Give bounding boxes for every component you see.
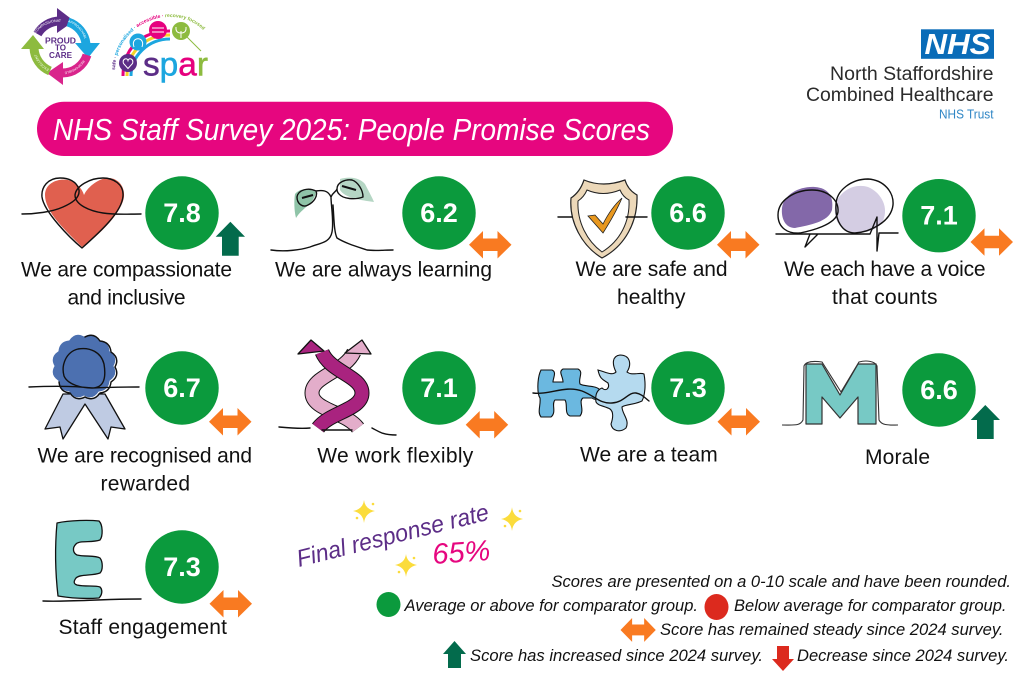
- icon: letter E: [43, 520, 141, 601]
- score circle: 6.6: [669, 198, 707, 228]
- score circle: [651, 351, 725, 425]
- label: We are safe and: [576, 258, 728, 281]
- label: We are always learning: [275, 258, 492, 282]
- logo: Proud to Care: EXCELLENT: [34, 54, 49, 71]
- label: We are recognised and: [38, 444, 252, 467]
- icon: speech bubbles: [776, 179, 898, 251]
- logo: NHS North Staffordshire Combined Healthcare: [806, 29, 994, 122]
- trust name: [806, 64, 994, 122]
- icon: shield with tick: [558, 180, 647, 258]
- panel: voice that counts: [776, 179, 1013, 309]
- label: [576, 258, 728, 309]
- score circle: [902, 179, 976, 252]
- label: rewarded: [100, 472, 190, 496]
- legend: decrease text: Decrease since 2024 survey.: [797, 647, 1009, 665]
- legend: orange steady arrow: [620, 618, 656, 642]
- NHS lozenge: NHS: [924, 29, 991, 61]
- score circle: [145, 176, 219, 250]
- arrow: increased: [216, 222, 245, 256]
- label: Morale: [865, 446, 930, 469]
- score circle: 6.7: [163, 373, 201, 403]
- trust name: NHS Trust: [939, 108, 994, 122]
- score circle: 7.1: [920, 201, 958, 231]
- label: We are a team: [580, 444, 718, 467]
- legend: green up arrow: [443, 641, 466, 668]
- legend: scale note: Scores are presented on a 0-10 scale and have been rounded.: [552, 573, 1011, 591]
- logo: Proud to Care: RESPONSIBLE: [64, 60, 85, 74]
- panel: safe and healthy: [558, 176, 760, 309]
- score circle: [402, 351, 476, 425]
- label: [21, 258, 232, 310]
- label: healthy: [617, 286, 686, 309]
- logo: Proud to Care: [21, 8, 100, 85]
- logo: Proud to Care: TO: [55, 44, 66, 53]
- icon: jigsaw pieces: [533, 355, 649, 431]
- label: We are compassionate: [21, 258, 232, 282]
- score circle: 7.3: [163, 552, 201, 582]
- panel: recognised and rewarded: [29, 334, 252, 496]
- score circle: 6.6: [920, 375, 958, 405]
- arrow: steady: [209, 408, 252, 436]
- arrow: steady: [718, 408, 760, 436]
- score circle: [402, 176, 476, 250]
- text: final response rate: Final response rate: [294, 499, 492, 573]
- legend: steady text: Score has remained steady since 2024 survey.: [660, 621, 1004, 639]
- score circle: [145, 530, 219, 604]
- label: We work flexibly: [317, 444, 474, 467]
- icon: sprout: [271, 178, 393, 251]
- arrow: steady: [469, 231, 512, 258]
- icon: sparkles: [353, 500, 523, 577]
- title banner: NHS Staff Survey 2025: People Promise Scores: [53, 112, 650, 147]
- legend: red down arrow: [772, 646, 794, 671]
- icon: rosette: [29, 334, 139, 439]
- legend: [376, 573, 1011, 671]
- legend: green circle: [376, 592, 400, 617]
- logo: spar: safe · personalised · accessible · recovery focused: [112, 14, 206, 70]
- arrow: steady: [970, 228, 1013, 256]
- callout: final response rate: [294, 499, 523, 577]
- label: We each have a voice: [784, 258, 986, 281]
- score circle: 7.1: [420, 373, 458, 403]
- title banner: [37, 102, 673, 156]
- panel: a team: [533, 351, 760, 467]
- logo: Proud to Care: PROUD: [45, 36, 76, 46]
- label: Staff engagement: [58, 616, 227, 639]
- arrow: steady: [466, 411, 508, 438]
- label: that counts: [832, 286, 938, 309]
- panel: work flexibly: [279, 340, 508, 467]
- arrow: steady: [210, 590, 252, 618]
- legend: average or above: Average or above for comparator group.: [403, 597, 698, 615]
- icon: letter M: [782, 361, 898, 425]
- panel: staff engagement: [43, 520, 252, 639]
- label: and inclusive: [68, 286, 186, 310]
- logo: Proud to Care: CARE: [49, 51, 73, 60]
- panel: compassionate and inclusive: [21, 176, 245, 310]
- panel: always learning: [271, 176, 512, 282]
- icon: heart: [22, 178, 141, 248]
- logo: spar: spar: [143, 46, 208, 82]
- trust name: North Staffordshire: [830, 64, 994, 85]
- score circle: [145, 351, 219, 425]
- trust name: Combined Healthcare: [806, 85, 994, 106]
- score circle: 7.3: [669, 373, 707, 403]
- score circle: [902, 353, 976, 427]
- label: [784, 258, 986, 309]
- legend: red circle: [704, 594, 728, 620]
- legend: increased text: Score has increased since 2024 survey.: [470, 647, 763, 665]
- label: [38, 444, 252, 496]
- text: 65%: 65%: [431, 535, 491, 571]
- legend: below average: Below average for comparator group.: [734, 597, 1006, 615]
- score circle: [651, 176, 725, 250]
- icon: intertwined arrows: [279, 340, 396, 435]
- panel: morale: [782, 353, 1000, 469]
- arrow: increased: [971, 405, 1000, 439]
- arrow: steady: [717, 231, 760, 258]
- score circle: 7.8: [163, 198, 201, 228]
- score circle: 6.2: [420, 198, 458, 228]
